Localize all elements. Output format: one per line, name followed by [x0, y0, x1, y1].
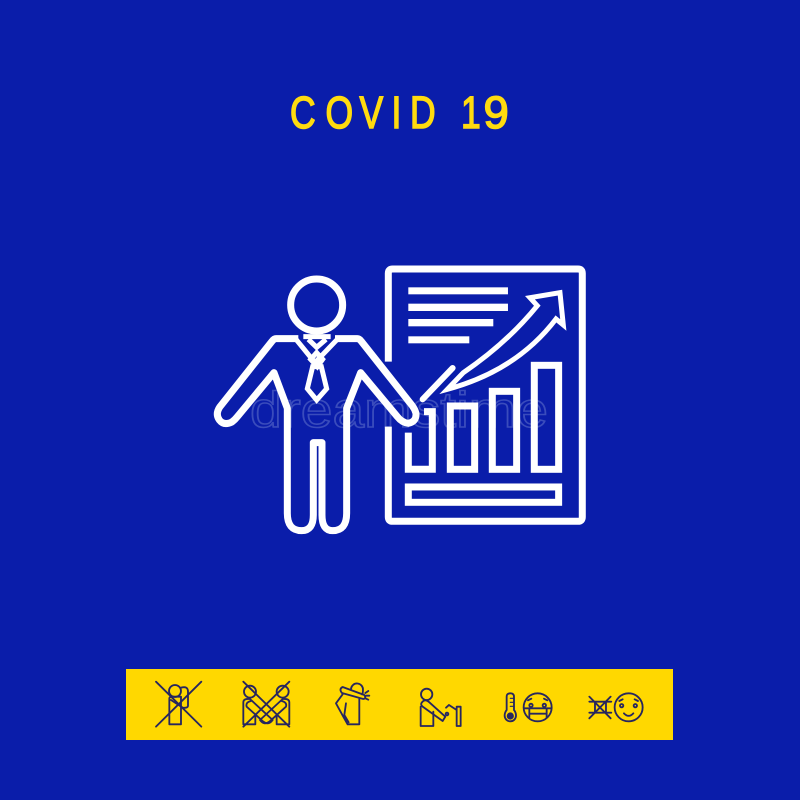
tie and collar: [296, 337, 337, 400]
title: COVID: [290, 87, 436, 138]
text lines: [408, 287, 508, 343]
icon: coughing into elbow: [336, 683, 369, 724]
watermark: dreamstime: [250, 382, 548, 438]
person head: [291, 279, 343, 331]
icon: thermometer and mask face: [505, 693, 552, 721]
rising arrow: [447, 293, 563, 389]
icon: no hugging: [156, 682, 201, 727]
icon: washing hands: [421, 689, 461, 726]
bar chart: [408, 365, 559, 502]
icon row: [156, 682, 643, 727]
title: 1: [461, 87, 481, 138]
title: 9: [484, 87, 509, 138]
document frame: [388, 269, 582, 521]
icon: no handshake: [243, 682, 289, 727]
person body: [217, 339, 416, 531]
icon: presenter with chart: [217, 269, 582, 531]
icon: crossed virus and smiley: [589, 693, 643, 721]
pointer: [423, 368, 453, 399]
yellow icon bar: [126, 669, 673, 740]
title: [290, 87, 509, 138]
